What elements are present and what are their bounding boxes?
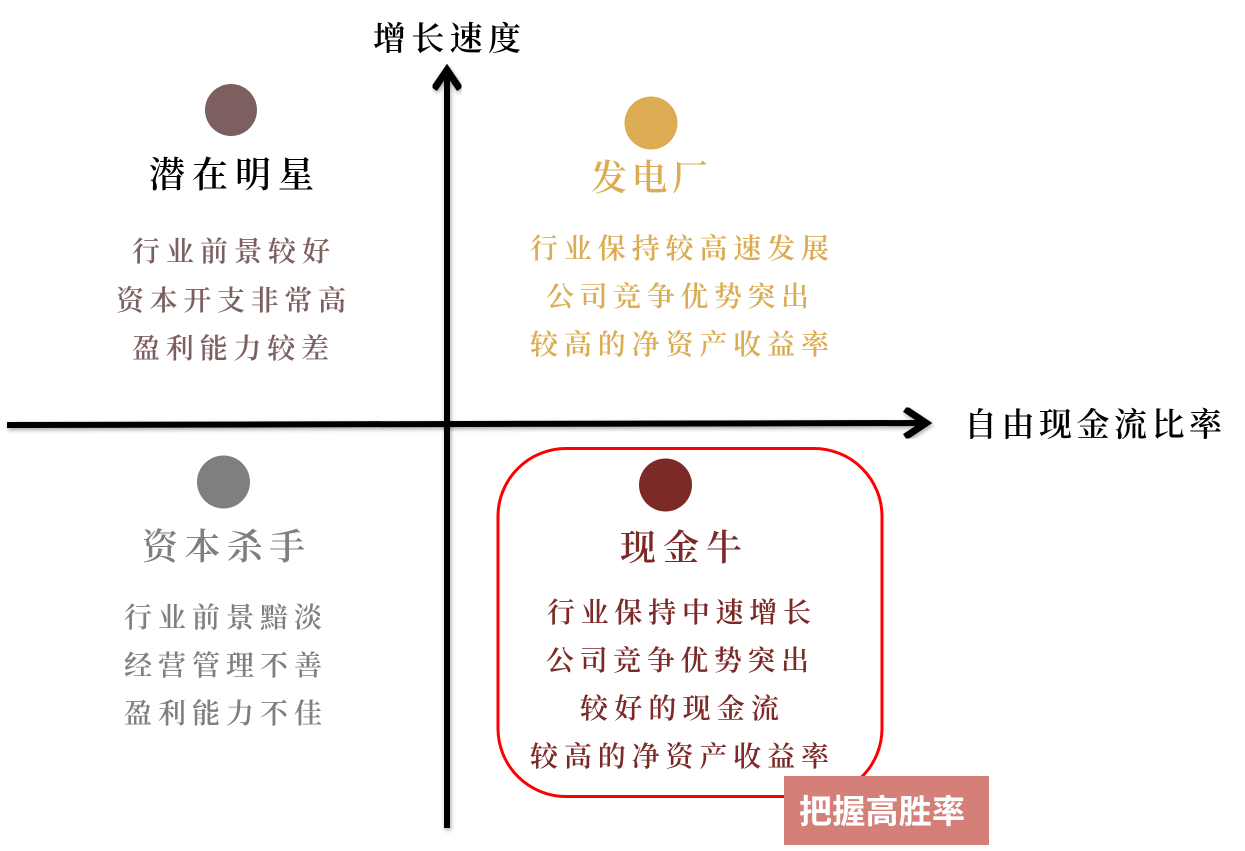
text block: capital killer traits: 行业前景黯淡 — [124, 602, 323, 634]
axis: horizontal arrow, free cash flow ratio — [7, 409, 926, 437]
text block: cash cow traits: 行业保持中速增长 — [547, 597, 811, 629]
axis: vertical arrow, growth speed — [434, 70, 460, 828]
x axis label: 自由现金流比率 — [964, 407, 1222, 444]
text block: power plant traits: 公司竞争优势突出 — [546, 281, 809, 313]
text block: potential star traits — [116, 236, 346, 365]
y axis label: 增长速度 — [373, 21, 521, 58]
text block: cash cow traits — [530, 597, 829, 773]
text block: potential star traits: 资本开支非常高 — [116, 285, 346, 317]
heading: cash cow: 现金牛 — [620, 528, 742, 568]
text block: cash cow traits: 较高的净资产收益率 — [530, 741, 829, 773]
panel: potential star — [116, 84, 346, 365]
icon: capital killer dot — [197, 456, 250, 508]
text block: potential star traits: 盈利能力较差 — [132, 333, 329, 365]
text block: cash cow traits: 较好的现金流 — [580, 693, 779, 725]
heading: power plant: 发电厂 — [591, 158, 708, 198]
panel: cash cow highlight — [498, 448, 882, 796]
text block: capital killer traits: 经营管理不善 — [124, 650, 322, 682]
panel: power plant — [530, 96, 829, 361]
highlight frame — [498, 448, 882, 796]
text block: capital killer traits — [124, 602, 323, 730]
callout: seize high win rate — [784, 776, 989, 845]
icon: potential star dot — [205, 84, 257, 136]
icon: power plant dot — [624, 96, 678, 150]
text block: power plant traits: 较高的净资产收益率 — [530, 329, 829, 361]
text block: capital killer traits: 盈利能力不佳 — [124, 698, 322, 730]
icon: cash cow dot — [639, 458, 692, 512]
callout: seize high win rate: 把握高胜率 — [799, 793, 965, 830]
heading: capital killer: 资本杀手 — [142, 527, 305, 567]
heading: potential star: 潜在明星 — [149, 155, 314, 195]
panel: capital killer — [124, 456, 323, 730]
text block: power plant traits: 行业保持较高速发展 — [530, 233, 829, 265]
text block: cash cow traits: 公司竞争优势突出 — [546, 645, 809, 677]
text block: power plant traits — [530, 233, 829, 361]
text block: potential star traits: 行业前景较好 — [132, 236, 330, 268]
